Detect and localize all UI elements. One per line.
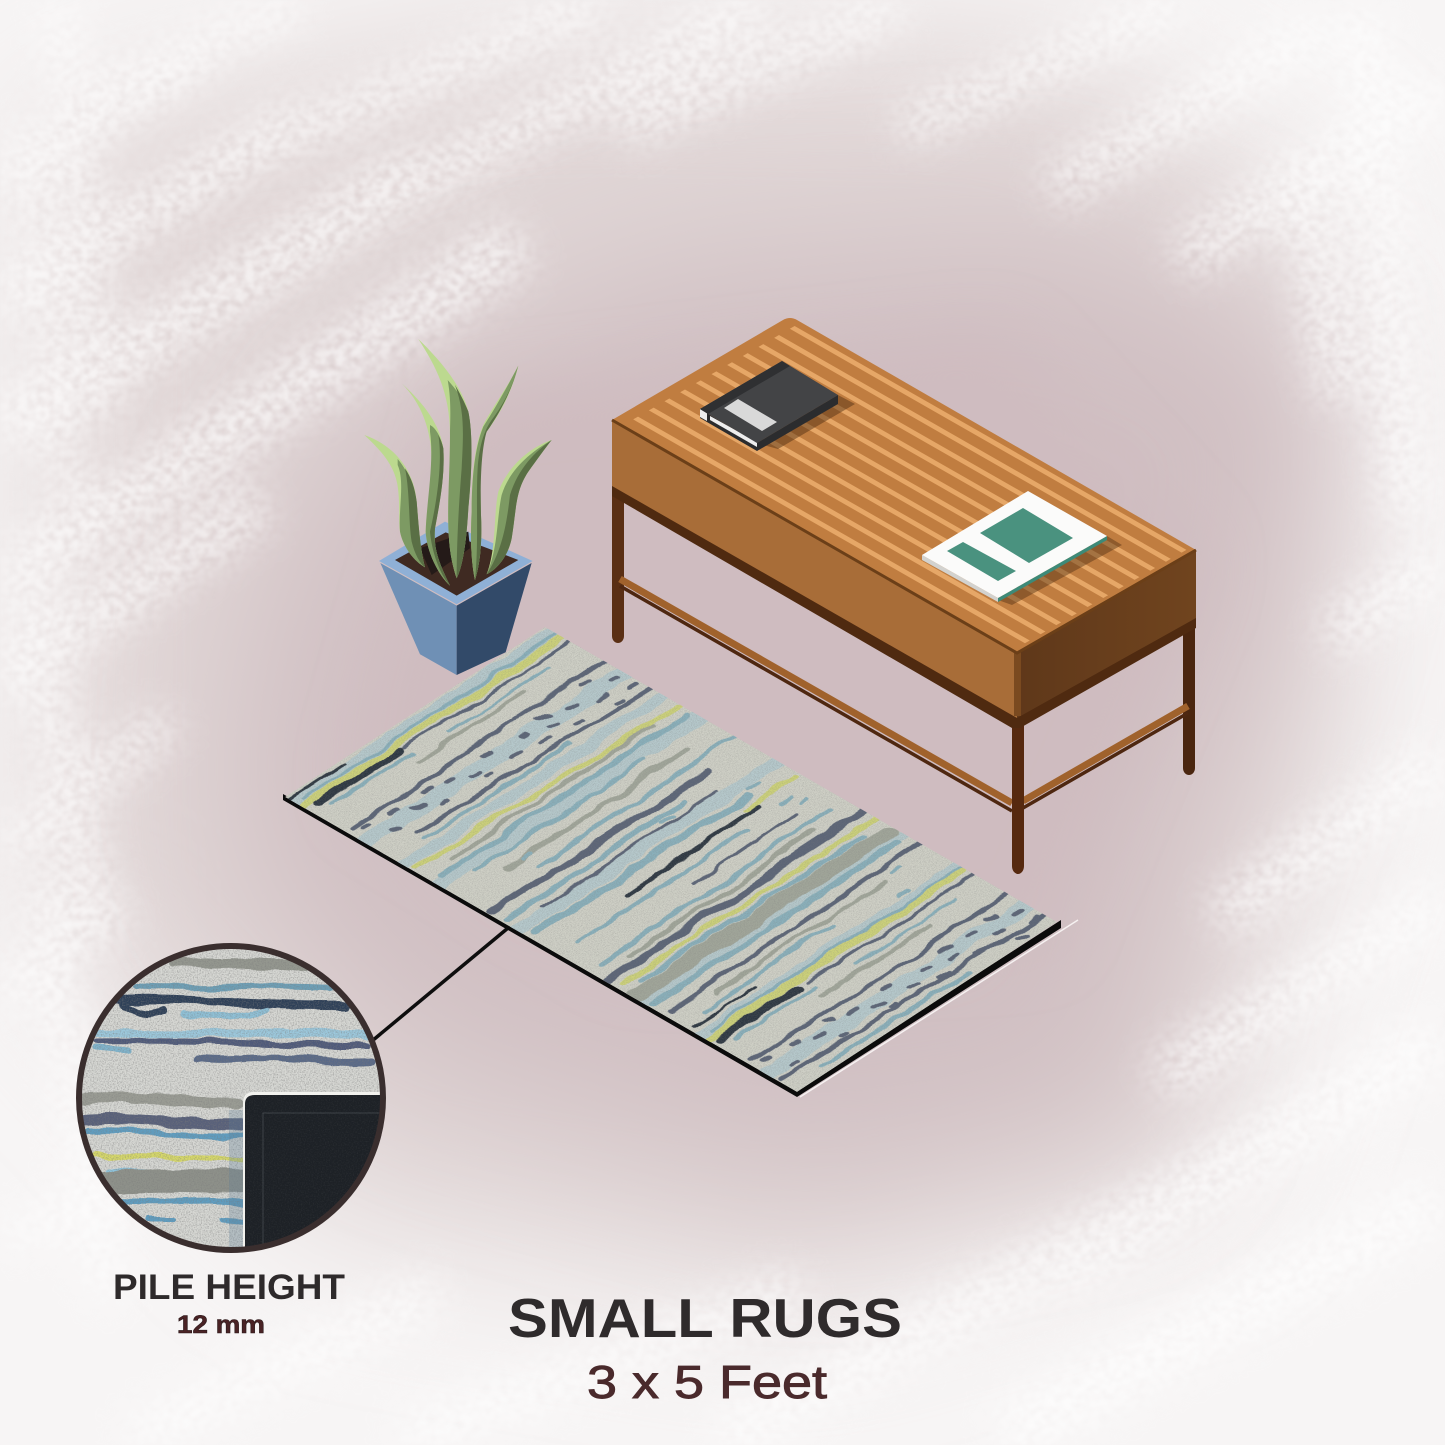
pot right face	[457, 563, 532, 675]
rug face with abstract stripes	[282, 625, 1060, 1094]
connector line from rug edge to zoom circle	[372, 928, 508, 1041]
table apron rails	[612, 484, 1196, 728]
title: SMALL RUGS	[508, 1287, 902, 1349]
pot rim	[379, 522, 533, 604]
leaf right	[487, 440, 552, 574]
pot left face	[380, 563, 457, 675]
pile height label: PILE HEIGHT	[113, 1268, 345, 1307]
pile height label	[113, 1268, 345, 1339]
magazine on table	[922, 491, 1122, 605]
rug	[282, 625, 1078, 1097]
table legs and stretchers	[612, 488, 1195, 874]
rug thin white floor outline	[800, 920, 1078, 1097]
table corner edge	[1014, 651, 1021, 716]
pot soil	[395, 532, 518, 596]
coffee table	[612, 318, 1196, 874]
potted plant	[364, 339, 552, 675]
leaf left	[364, 435, 425, 567]
leaf right tall	[471, 366, 518, 580]
leaf second	[402, 383, 450, 586]
title	[508, 1287, 902, 1408]
pile height label: 12 mm	[177, 1311, 265, 1339]
detail circle: pile close-up	[76, 943, 386, 1253]
notebook on table	[700, 361, 855, 451]
table front face	[612, 420, 1017, 718]
title: 3 x 5 Feet	[587, 1356, 827, 1408]
rug backing corner	[229, 1092, 380, 1247]
table side face	[1017, 550, 1196, 718]
table top	[612, 318, 1196, 653]
close-up stripes	[82, 949, 380, 1247]
rug thickness edge	[283, 794, 1061, 1097]
leaf centre	[418, 339, 471, 578]
